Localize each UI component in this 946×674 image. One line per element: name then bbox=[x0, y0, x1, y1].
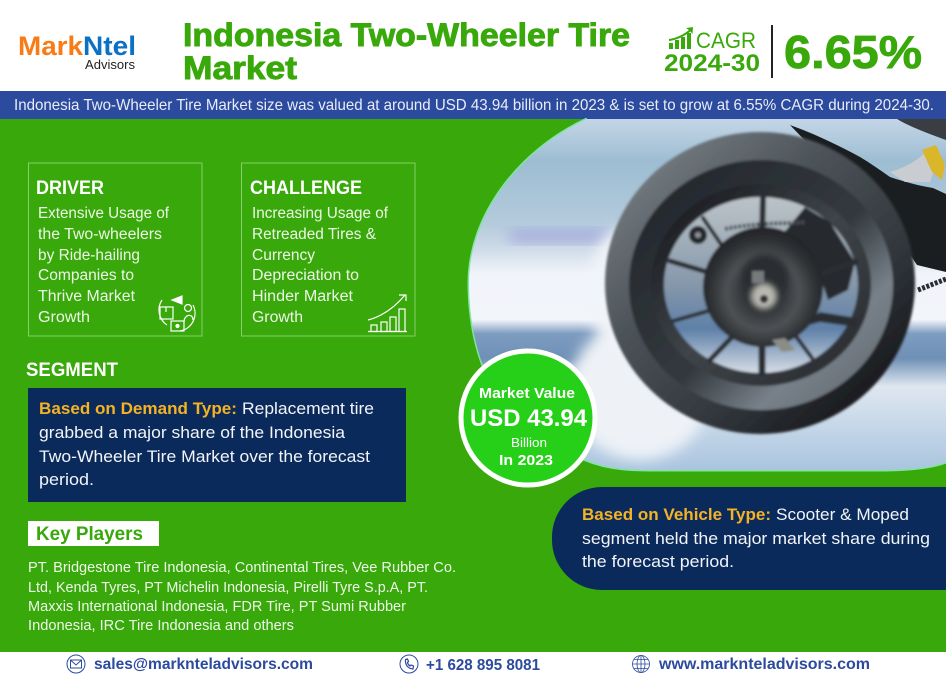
contact: phone bbox=[400, 655, 540, 674]
panel: demand type: Two-Wheeler Tire Market over the forecast bbox=[39, 447, 370, 466]
callout: vehicle type: Based on Vehicle Type: bbox=[582, 505, 771, 524]
panel: demand type: period. bbox=[39, 470, 94, 489]
challenge text: Retreaded Tires & bbox=[252, 226, 377, 243]
heading: key players bbox=[28, 521, 159, 546]
footer band bbox=[0, 652, 946, 674]
panel: demand type bbox=[28, 388, 406, 502]
title bbox=[183, 17, 630, 86]
logo: Advisors bbox=[85, 57, 135, 72]
summary banner bbox=[0, 91, 946, 119]
heading: segment: SEGMENT bbox=[26, 360, 118, 381]
callout: market value bbox=[461, 351, 595, 485]
challenge text: Hinder Market bbox=[252, 288, 354, 305]
driver text: by Ride-hailing bbox=[38, 247, 140, 264]
frame behind the wheel bbox=[790, 125, 946, 272]
heading: key players: Key Players bbox=[36, 524, 143, 545]
callout: market value: In 2023 bbox=[499, 452, 553, 469]
callout: market value: Market Value bbox=[479, 385, 575, 402]
panel: driver: DRIVER bbox=[36, 178, 104, 199]
callout: market value: Billion bbox=[511, 435, 547, 450]
key players list: Ltd, Kenda Tyres, PT Michelin Indonesia, Pirelli Tyre S.p.A, PT. bbox=[28, 580, 428, 596]
callout: vehicle type bbox=[552, 487, 946, 590]
swingarm behind spokes bbox=[782, 207, 855, 300]
CAGR block bbox=[664, 25, 922, 78]
callout: vehicle type: segment held the major market share during bbox=[582, 529, 930, 548]
icon: growth chart bbox=[669, 27, 693, 49]
panel: challenge bbox=[242, 163, 415, 336]
logo: Ntel bbox=[83, 31, 136, 61]
callout: vehicle type: Scooter & Moped bbox=[776, 505, 909, 524]
wheel bbox=[605, 132, 915, 434]
challenge text bbox=[252, 205, 389, 326]
challenge text: Currency bbox=[252, 247, 315, 264]
callout: vehicle type: the forecast period. bbox=[582, 552, 734, 571]
challenge text: Depreciation to bbox=[252, 267, 359, 284]
green background panel bbox=[0, 119, 946, 652]
contact: website: www.marknteladvisors.com bbox=[658, 656, 870, 673]
driver text: the Two-wheelers bbox=[38, 226, 162, 243]
header band bbox=[0, 0, 946, 91]
icon: email bbox=[67, 655, 85, 673]
driver text bbox=[38, 205, 170, 326]
panel: demand type: Based on Demand Type: bbox=[39, 399, 237, 418]
key players list: Maxxis International Indonesia, FDR Tire, PT Sumi Rubber bbox=[28, 599, 406, 615]
logo: Mark bbox=[18, 31, 84, 61]
challenge text: Growth bbox=[252, 309, 303, 326]
icon: globe bbox=[632, 656, 650, 672]
logo bbox=[18, 31, 136, 72]
hub bbox=[703, 227, 823, 347]
panel: driver bbox=[28, 163, 202, 336]
panel: demand type: grabbed a major share of the Indonesia bbox=[39, 423, 346, 442]
title: Indonesia Two-Wheeler Tire bbox=[183, 17, 630, 53]
driver text: Growth bbox=[38, 309, 90, 326]
CAGR block: CAGR bbox=[696, 28, 756, 53]
spokes bbox=[670, 198, 855, 372]
callout: market value: USD 43.94 bbox=[470, 405, 588, 432]
contact: phone: +1 628 895 8081 bbox=[426, 657, 540, 674]
photo: motorcycle wheel bbox=[460, 119, 946, 471]
icon: marketing circle bbox=[159, 296, 195, 331]
key players list: PT. Bridgestone Tire Indonesia, Continental Tires, Vee Rubber Co. bbox=[28, 560, 456, 576]
tyre bbox=[605, 132, 915, 434]
driver text: Thrive Market bbox=[38, 288, 136, 305]
title: Market bbox=[183, 50, 297, 86]
key players list: Indonesia, IRC Tire Indonesia and others bbox=[28, 618, 294, 634]
challenge text: Increasing Usage of bbox=[252, 205, 389, 222]
panel: challenge: CHALLENGE bbox=[250, 178, 362, 199]
CAGR block: 2024-30 bbox=[664, 50, 760, 77]
driver text: Companies to bbox=[38, 267, 134, 284]
driver text: Extensive Usage of bbox=[38, 205, 170, 222]
panel: demand type: Replacement tire bbox=[242, 399, 374, 418]
icon: phone bbox=[400, 655, 418, 673]
CAGR block: 6.65% bbox=[784, 26, 922, 78]
key players list bbox=[28, 560, 456, 634]
contact: email: sales@marknteladvisors.com bbox=[94, 656, 313, 673]
icon: rising bars bbox=[368, 295, 407, 332]
